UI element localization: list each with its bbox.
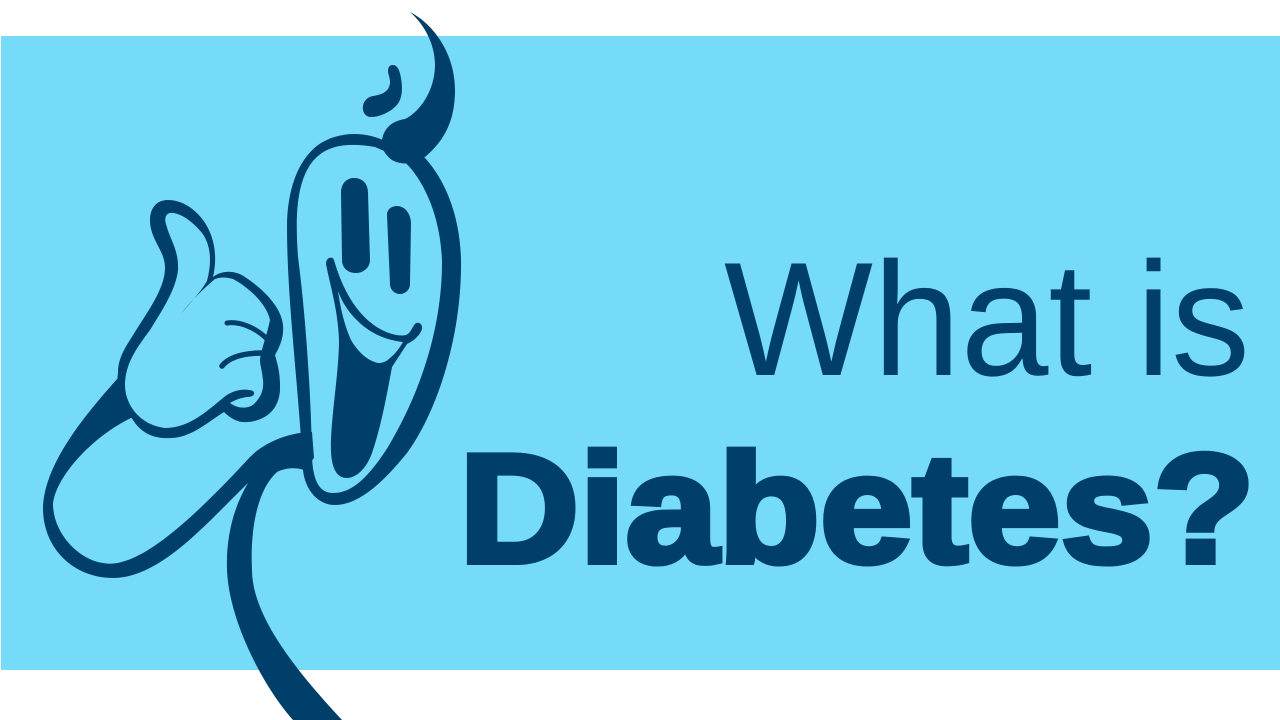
mascot arm and body (43, 378, 342, 720)
mascot head outline (287, 134, 461, 505)
hand finger line upper (227, 323, 267, 339)
hand finger line lower (222, 353, 263, 366)
mouth teeth highlight (338, 291, 403, 363)
mascot hand giving a thumbs up (116, 200, 283, 438)
mascot left eye (341, 178, 370, 273)
heading line: What is: What is (724, 229, 1250, 410)
mascot: smiling thumbs-up character (43, 12, 461, 720)
hair tuft (382, 12, 455, 163)
floating hair curl (363, 65, 402, 117)
mascot right eye (387, 206, 411, 294)
mascot open mouth (326, 258, 422, 478)
heading line: Diabetes?: Diabetes? (459, 422, 1255, 595)
